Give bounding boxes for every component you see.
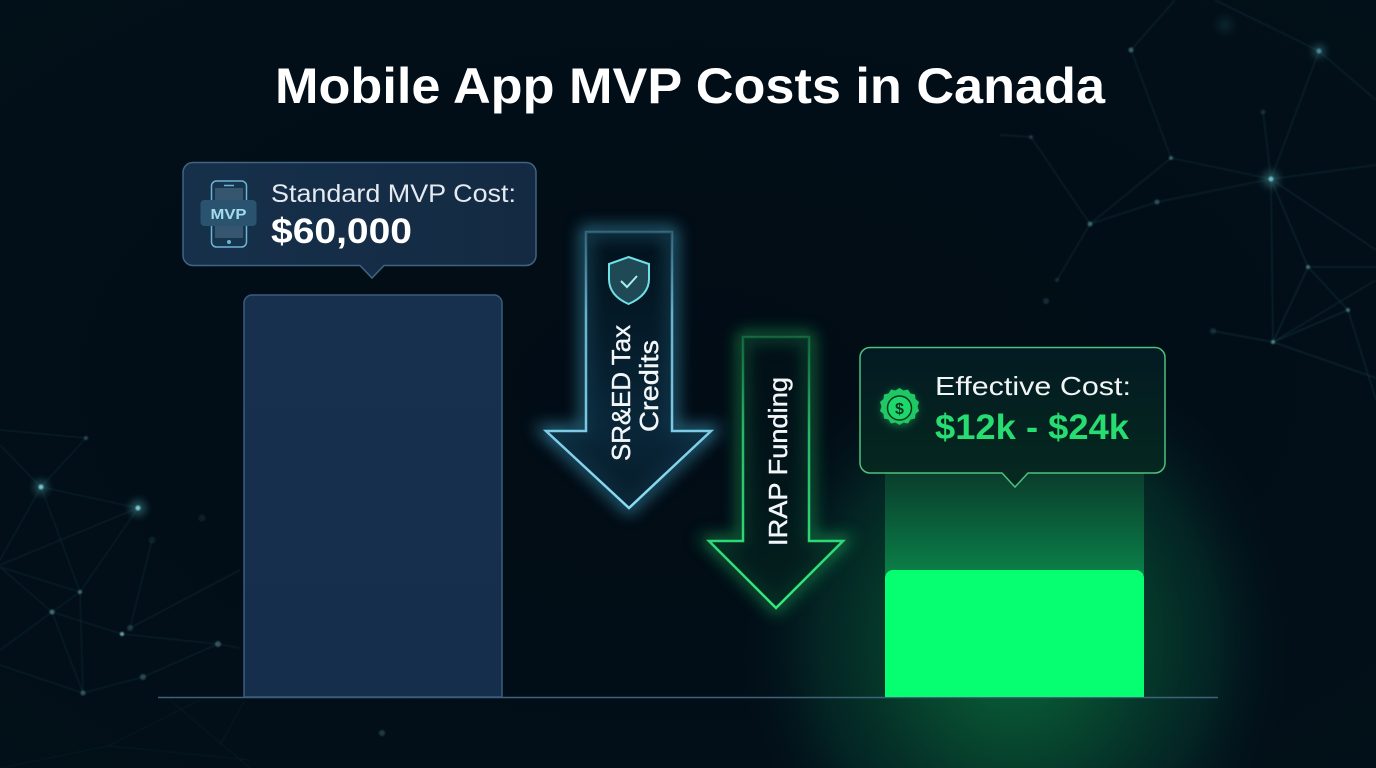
arrow: IRAP funding xyxy=(709,337,843,608)
title: Mobile App MVP Costs in Canada xyxy=(275,58,1106,114)
bar: effective cost xyxy=(885,570,1144,697)
bar: effective cost glow column xyxy=(885,470,1144,575)
label: standard MVP cost: Standard MVP Cost: xyxy=(271,180,516,208)
label: effective cost: Effective Cost: xyxy=(935,371,1131,401)
network pattern top right xyxy=(1000,0,1376,400)
label: SR&ED tax credits: SR&ED Tax xyxy=(606,325,636,461)
label: SR&ED tax credits xyxy=(606,325,664,461)
bar: standard MVP cost xyxy=(244,295,502,697)
value: $60,000: $60,000 xyxy=(271,212,412,251)
callout: standard MVP cost xyxy=(183,162,536,278)
arrow: SR&ED tax credits xyxy=(546,232,711,508)
label: IRAP funding: IRAP Funding xyxy=(763,377,793,546)
value: $12k - $24k: $12k - $24k xyxy=(935,408,1130,447)
label: SR&ED tax credits: Credits xyxy=(634,340,664,432)
icon: dollar badge xyxy=(880,388,919,426)
axis baseline xyxy=(158,696,1218,698)
icon: shield check xyxy=(609,257,649,304)
callout: effective cost xyxy=(860,348,1165,487)
icon: phone with MVP tag: MVP xyxy=(210,206,246,223)
icon: phone with MVP tag xyxy=(200,181,256,247)
icon: dollar badge: $ xyxy=(895,401,904,418)
network pattern bottom left xyxy=(0,430,385,768)
